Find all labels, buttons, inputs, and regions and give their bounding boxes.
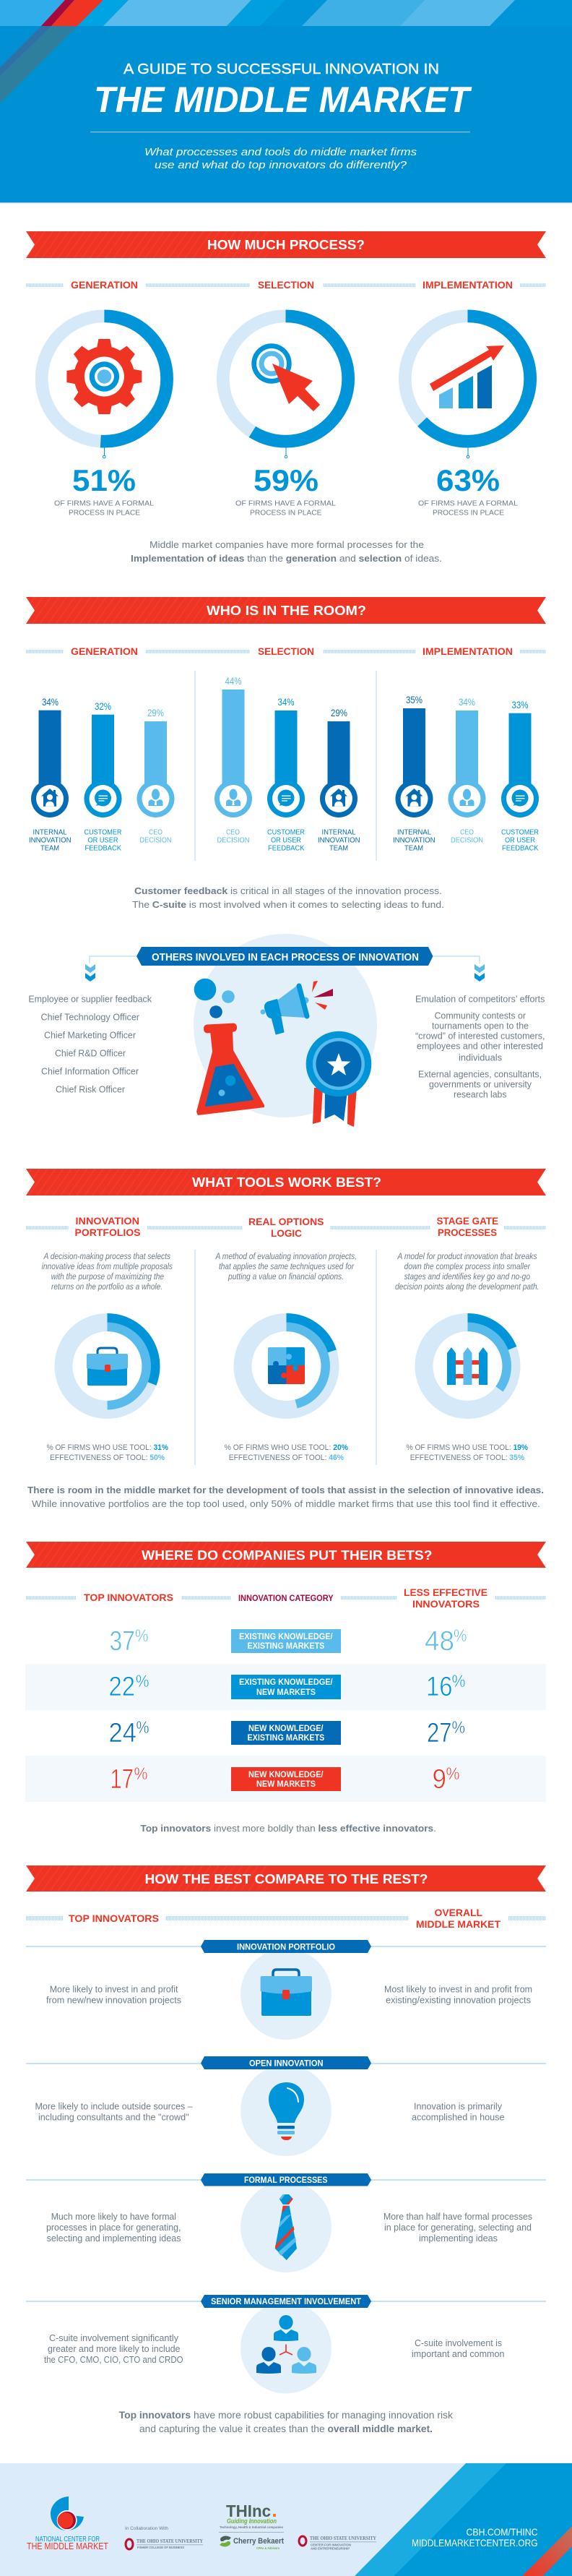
column headings: tools: PROCESSES — [438, 1227, 497, 1238]
table row: existing knowledge / new markets: 22 — [108, 1672, 135, 1702]
stats: real options logic — [225, 1443, 348, 1462]
comparison row: senior management involvement — [26, 2295, 546, 2394]
stat: generation: PROCESS IN PLACE — [69, 510, 140, 518]
stat: selection — [235, 463, 336, 518]
tool description: stage gate processes: A model for product innovation that breaks — [397, 1253, 537, 1261]
icon: target and cursor — [251, 343, 320, 411]
icon: growth bar chart — [430, 345, 504, 408]
tool description: innovation portfolios — [42, 1253, 173, 1292]
stats: stage gate processes: EFFECTIVENESS OF TOOL: 35% — [410, 1454, 524, 1462]
table row: existing knowledge / existing markets — [110, 1626, 467, 1657]
table row: existing knowledge / existing markets: % — [135, 1626, 149, 1646]
bar chart: selection: DECISION — [217, 837, 250, 845]
donut chart: stage gate processes — [420, 1318, 516, 1414]
summary text: compare — [119, 2409, 454, 2434]
stats: innovation portfolios: % OF FIRMS WHO USE TOOL: 31% — [47, 1443, 168, 1452]
column headings: GENERATION — [71, 279, 138, 291]
stat: selection: OF FIRMS HAVE A FORMAL — [235, 500, 336, 508]
logo: thinc: Guiding Innovation — [227, 2517, 277, 2525]
stat: selection: 59% — [254, 463, 318, 497]
logo: cherry bekaert: CPAs & Advisors — [256, 2546, 280, 2550]
column headings: IMPLEMENTATION — [422, 279, 513, 291]
table row: new knowledge / existing markets: NEW KNOWLEDGE/ — [248, 1725, 324, 1733]
table row: new knowledge / new markets: 9 — [432, 1764, 446, 1795]
subtitle — [144, 147, 417, 171]
column headings: compare: MIDDLE MARKET — [416, 1918, 500, 1930]
logo: thinc — [219, 2502, 284, 2533]
logo: ohio state center for innovation: THE OHIO STATE UNIVERSITY — [310, 2535, 376, 2541]
summary text: compare: and capturing the value it creates than the overall middle market. — [139, 2423, 433, 2434]
comparison row: open innovation: including consultants and the "crowd" — [38, 2112, 189, 2122]
list: right: External agencies, consultants, — [418, 1068, 542, 1080]
table row: existing knowledge / new markets: NEW MARKETS — [256, 1688, 316, 1697]
footer links: MIDDLEMARKETCENTER.ORG — [412, 2537, 537, 2549]
comparison row: innovation portfolio: INNOVATION PORTFOLIO — [237, 1943, 335, 1952]
list: right: employees and other interested — [417, 1041, 543, 1051]
column headings: bets: INNOVATION CATEGORY — [238, 1594, 334, 1603]
icon: megaphone — [260, 981, 333, 1034]
title — [90, 61, 472, 132]
bar chart: generation: CUSTOMER — [84, 829, 121, 837]
column headings: SELECTION — [258, 645, 314, 657]
column headings: bets — [26, 1587, 546, 1610]
title: THE MIDDLE MARKET — [94, 80, 472, 120]
comparison row: open innovation — [26, 2056, 546, 2156]
table row: new knowledge / existing markets: % — [136, 1718, 149, 1738]
comparison row: open innovation: accomplished in house — [412, 2112, 504, 2122]
summary text: process: Implementation of ideas than the generation and selection of ideas. — [131, 553, 442, 564]
section heading: how the best compare to the rest — [26, 1866, 546, 1892]
column headings: tools: PORTFOLIOS — [75, 1227, 140, 1238]
summary text: who is in the room: The C-suite is most involved when it comes to selecting ideas to fund. — [132, 899, 444, 910]
summary text: process — [131, 539, 442, 564]
footer links: CBH.COM/THINC — [467, 2526, 537, 2538]
section heading: what tools work best — [26, 1169, 546, 1195]
bar chart: generation: 34% — [42, 696, 58, 708]
comparison row: formal processes: in place for generating, selecting and — [384, 2222, 532, 2233]
column headings — [26, 279, 546, 291]
subtitle: What proccesses and tools do middle market firms — [144, 147, 417, 158]
summary text: tools: There is room in the middle market for the development of tools that assist in the selection of innovative ideas. — [27, 1485, 544, 1495]
column headings: bets: INNOVATORS — [412, 1598, 480, 1610]
tool description: stage gate processes: down the complex process into smaller — [404, 1263, 531, 1271]
icon: bubbles — [194, 979, 235, 1018]
tool description: innovation portfolios: A decision-making process that selects — [43, 1253, 170, 1261]
bar chart: selection: INNOVATION — [318, 837, 360, 845]
footer links — [412, 2526, 537, 2549]
summary text: bets: Top innovators invest more boldly than less effective innovators . — [140, 1823, 436, 1834]
stat: implementation: PROCESS IN PLACE — [433, 510, 504, 518]
logo: cherry bekaert: Cherry Bekaert — [233, 2537, 284, 2546]
table row: new knowledge / new markets: % — [446, 1764, 459, 1784]
bar chart: implementation: CUSTOMER — [501, 829, 539, 837]
stats: real options logic: % OF FIRMS WHO USE TOOL: 20% — [225, 1443, 348, 1452]
icon: medal — [306, 1031, 371, 1127]
table row: existing knowledge / existing markets: EXISTING KNOWLEDGE/ — [239, 1633, 333, 1641]
tool description: stage gate processes: stages and identifies key go and no-go — [404, 1273, 531, 1281]
table row: existing knowledge / existing markets: 37 — [110, 1626, 135, 1657]
table row: existing knowledge / new markets: EXISTING KNOWLEDGE/ — [239, 1678, 333, 1687]
donut chart: generation 51% — [42, 316, 167, 458]
bar chart: implementation: CEO — [460, 829, 474, 837]
icon: flask — [196, 1023, 264, 1115]
column headings: tools: INNOVATION — [75, 1215, 139, 1227]
stat: generation: 51% — [72, 463, 136, 497]
table row: new knowledge / new markets: NEW MARKETS — [256, 1780, 316, 1789]
bar chart: selection: TEAM — [329, 845, 348, 853]
list: right: Emulation of competitors’ efforts — [415, 993, 545, 1005]
bar chart: generation: FEEDBACK — [85, 845, 121, 853]
table row: new knowledge / existing markets: % — [452, 1718, 465, 1738]
logo: national center for the middle market: THE MIDDLE MARKET — [27, 2541, 108, 2551]
comparison row: innovation portfolio: Most likely to invest in and profit from — [384, 1983, 532, 1995]
bar chart: generation — [29, 696, 175, 853]
summary text: tools — [27, 1485, 544, 1509]
table row: new knowledge / new markets: % — [134, 1764, 147, 1784]
stat: generation: OF FIRMS HAVE A FORMAL — [54, 500, 154, 508]
tool description: innovation portfolios: innovative ideas from multiple proposals — [42, 1263, 173, 1271]
column headings: bets: LESS EFFECTIVE — [404, 1587, 488, 1598]
bar chart: selection: INTERNAL — [322, 829, 356, 837]
title: A GUIDE TO SUCCESSFUL INNOVATION IN — [124, 61, 439, 77]
tool description: stage gate processes: decision points along the development path. — [395, 1283, 539, 1292]
column headings: tools — [26, 1215, 546, 1239]
stats: real options logic: EFFECTIVENESS OF TOOL: 46% — [229, 1454, 344, 1462]
column headings: tools: LOGIC — [271, 1227, 302, 1239]
summary text: tools: While innovative portfolios are the top tool used, only 50% of middle market firms that use this tool find it effective. — [32, 1498, 540, 1509]
column headings: IMPLEMENTATION — [422, 645, 513, 657]
comparison row: open innovation: OPEN INNOVATION — [249, 2060, 324, 2069]
logo: cherry bekaert — [220, 2536, 284, 2550]
stat: implementation: OF FIRMS HAVE A FORMAL — [418, 500, 518, 508]
table row: existing knowledge / existing markets: % — [454, 1626, 467, 1646]
logo: national center for the middle market: NATIONAL CENTER FOR — [35, 2536, 100, 2543]
bar chart: generation: INNOVATION — [29, 837, 72, 845]
list: right: Community contests or — [435, 1010, 526, 1021]
stats: stage gate processes — [407, 1443, 528, 1462]
icon: gear — [66, 339, 142, 414]
stat: selection: PROCESS IN PLACE — [250, 510, 322, 518]
bar chart: implementation — [393, 694, 539, 853]
comparison row: formal processes: implementing ideas — [419, 2233, 498, 2244]
table row: existing knowledge / new markets: % — [136, 1672, 149, 1691]
table row: new knowledge / new markets: NEW KNOWLEDGE/ — [248, 1771, 324, 1779]
comparison row: formal processes: More than half have formal processes — [384, 2211, 532, 2222]
table row: new knowledge / existing markets — [108, 1718, 465, 1748]
column headings: bets: TOP INNOVATORS — [84, 1592, 173, 1603]
section heading: what tools work best: WHAT TOOLS WORK BEST? — [192, 1175, 381, 1190]
collaboration label: In Collaboration With — [125, 2526, 168, 2531]
bar chart: implementation: TEAM — [404, 845, 423, 853]
comparison row: senior management involvement: greater and more likely to include — [48, 2343, 181, 2354]
comparison row: formal processes: FORMAL PROCESSES — [244, 2176, 328, 2185]
summary text: process: Middle market companies have more formal processes for the — [150, 539, 424, 550]
comparison row: innovation portfolio: More likely to invest in and profit — [50, 1983, 178, 1995]
list: right: governments or university — [429, 1078, 532, 1090]
section heading: who is in the room — [26, 597, 546, 624]
list: left: Chief Risk Officer — [56, 1084, 126, 1094]
list: right: “crowd” of interested customers, — [415, 1031, 545, 1041]
column headings: tools: REAL OPTIONS — [248, 1216, 324, 1227]
bar chart: implementation: 35% — [406, 694, 422, 705]
table row: existing knowledge / new markets — [108, 1672, 465, 1702]
bar chart: generation: INTERNAL — [33, 829, 67, 837]
table row: new knowledge / new markets: 17 — [110, 1764, 134, 1795]
comparison row: open innovation: More likely to include outside sources – — [35, 2100, 193, 2112]
comparison row: senior management involvement: C-suite involvement significantly — [49, 2332, 178, 2343]
circle backdrop — [194, 934, 377, 1117]
donut chart: implementation 63% — [405, 316, 530, 458]
comparison row: innovation portfolio: from new/new innovation projects — [46, 1995, 181, 2005]
bar chart: generation: CEO — [149, 829, 162, 837]
subtitle: use and what do top innovators do differently? — [155, 160, 407, 171]
sub-heading: others involved — [136, 947, 433, 966]
logo: ohio state fisher college: FISHER COLLEGE OF BUSINESS — [137, 2546, 184, 2549]
list: right: individuals — [459, 1052, 502, 1062]
comparison row: senior management involvement: C-suite involvement is — [415, 2337, 502, 2348]
donut chart: innovation portfolios — [59, 1318, 155, 1414]
list: left: Chief Technology Officer — [40, 1012, 140, 1022]
bar chart: generation: DECISION — [140, 837, 172, 845]
bar chart: selection: 29% — [331, 707, 347, 718]
comparison row: senior management involvement: important and common — [412, 2348, 504, 2359]
sub-heading: others involved: OTHERS INVOLVED IN EACH PROCESS OF INNOVATION — [152, 951, 419, 963]
comparison row: senior management involvement: SENIOR MANAGEMENT INVOLVEMENT — [211, 2298, 361, 2306]
list: left: Chief Marketing Officer — [44, 1029, 136, 1041]
list: left: Employee or supplier feedback — [28, 993, 152, 1005]
bar chart: selection: CEO — [226, 829, 240, 837]
bar chart: selection: FEEDBACK — [268, 845, 305, 853]
column headings: tools: STAGE GATE — [436, 1215, 498, 1227]
table row: new knowledge / existing markets: 24 — [108, 1718, 136, 1748]
bar chart: implementation: 33% — [511, 699, 529, 710]
column headings: compare: TOP INNOVATORS — [69, 1912, 159, 1924]
table row: new knowledge / existing markets: EXISTING MARKETS — [247, 1734, 325, 1743]
bar chart: generation: 32% — [95, 700, 111, 712]
tool description: innovation portfolios: with the purpose of maximizing the — [51, 1273, 164, 1281]
header banner — [0, 0, 572, 203]
stats: stage gate processes: % OF FIRMS WHO USE TOOL: 19% — [407, 1443, 528, 1452]
bar chart: selection: CUSTOMER — [267, 829, 305, 837]
comparison row: formal processes: processes in place for generating, — [46, 2222, 181, 2233]
logo: national center for the middle market — [27, 2496, 108, 2551]
tool description: real options logic: A method of evaluating innovation projects, — [215, 1253, 357, 1261]
logo: thinc: THInc — [226, 2502, 271, 2520]
donut chart: real options logic — [238, 1318, 334, 1414]
section heading: how much process — [26, 231, 546, 258]
section heading: where do companies put their bets: WHERE DO COMPANIES PUT THEIR BETS? — [142, 1548, 432, 1563]
comparison row: innovation portfolio — [26, 1940, 546, 2040]
bar chart: selection: OR USER — [271, 837, 301, 845]
bar chart: selection: 44% — [225, 675, 241, 687]
comparison row: innovation portfolio: existing/existing innovation projects — [386, 1995, 531, 2005]
section heading: where do companies put their bets — [26, 1542, 546, 1568]
icon: fence gate — [447, 1347, 488, 1385]
table row: new knowledge / new markets — [110, 1764, 459, 1795]
table row: existing knowledge / new markets: 16 — [426, 1672, 452, 1702]
stat: implementation — [418, 463, 518, 518]
logo: thinc: Technology, Health & Industrial companies — [220, 2525, 283, 2530]
comparison row: open innovation: Innovation is primarily — [414, 2100, 502, 2112]
summary text: who is in the room: Customer feedback is critical in all stages of the innovation process. — [134, 885, 442, 896]
icon: briefcase — [87, 1348, 128, 1386]
footer background — [0, 2463, 572, 2576]
tool description: real options logic: that applies the same techniques used for — [219, 1263, 355, 1271]
stats: innovation portfolios — [47, 1443, 168, 1462]
list: left: Chief R&D Officer — [55, 1048, 126, 1058]
bar chart: implementation: OR USER — [505, 837, 535, 845]
bar chart: generation: TEAM — [40, 845, 59, 853]
section heading: how the best compare to the rest: HOW THE BEST COMPARE TO THE REST? — [144, 1872, 428, 1886]
comparison row: formal processes: Much more likely to have formal — [51, 2211, 176, 2222]
bar chart: selection — [214, 675, 360, 853]
logo: ohio state fisher college: THE OHIO STATE UNIVERSITY — [136, 2538, 203, 2544]
summary text: who is in the room — [132, 885, 444, 910]
icon: puzzle — [268, 1347, 305, 1384]
column headings: compare: OVERALL — [435, 1907, 482, 1918]
column headings: SELECTION — [258, 279, 314, 291]
column headings — [26, 645, 546, 657]
connectors and chevrons — [85, 956, 485, 982]
logo: ohio state center for innovation: AND ENTREPRENEURSHIP — [311, 2547, 350, 2550]
list: right — [415, 993, 545, 1100]
list: left: Chief Information Officer — [41, 1065, 139, 1077]
list: right: research labs — [454, 1089, 507, 1100]
logo: ohio state fisher college — [126, 2538, 203, 2549]
table row: new knowledge / existing markets: 27 — [427, 1718, 452, 1748]
comparison row: senior management involvement: the CFO, CMO, CIO, CTO and CRDO — [44, 2354, 183, 2365]
donut chart: selection 59% — [223, 316, 348, 458]
comparison row: formal processes: selecting and implementing ideas — [47, 2233, 181, 2244]
comparison row: formal processes — [26, 2173, 546, 2272]
stat: implementation: 63% — [436, 463, 500, 497]
column headings: GENERATION — [71, 645, 138, 657]
table row: existing knowledge / existing markets: EXISTING MARKETS — [247, 1642, 325, 1651]
stats: innovation portfolios: EFFECTIVENESS OF TOOL: 50% — [50, 1454, 165, 1462]
stat: generation — [54, 463, 154, 518]
bar chart: implementation: INNOVATION — [393, 837, 436, 845]
tool description: real options logic: putting a value on financial options. — [228, 1273, 344, 1281]
bar chart: selection: 34% — [277, 696, 295, 708]
tool description: stage gate processes — [395, 1253, 539, 1292]
bar chart: generation: OR USER — [88, 837, 118, 845]
table row: existing knowledge / new markets: % — [452, 1672, 465, 1691]
tool description: real options logic — [215, 1253, 357, 1281]
column headings: compare — [26, 1907, 546, 1930]
bar chart: implementation: INTERNAL — [397, 829, 431, 837]
logo: ohio state center for innovation — [299, 2535, 376, 2550]
table row: existing knowledge / existing markets: 48 — [425, 1626, 454, 1657]
tool description: innovation portfolios: returns on the portfolio as a whole. — [51, 1283, 162, 1292]
section heading: who is in the room: WHO IS IN THE ROOM? — [207, 604, 366, 618]
section heading: how much process: HOW MUCH PROCESS? — [207, 238, 365, 252]
bar chart: implementation: FEEDBACK — [502, 845, 539, 853]
list: left — [28, 993, 152, 1094]
bar chart: implementation: 34% — [459, 696, 475, 708]
bar chart: implementation: DECISION — [451, 837, 483, 845]
list: right: tournaments open to the — [432, 1021, 529, 1031]
logo: ohio state center for innovation: CENTER FOR INNOVATION — [311, 2543, 351, 2547]
summary text: compare: Top innovators have more robust capabilities for managing innovation risk — [119, 2409, 454, 2421]
bar chart: generation: 29% — [147, 707, 164, 718]
